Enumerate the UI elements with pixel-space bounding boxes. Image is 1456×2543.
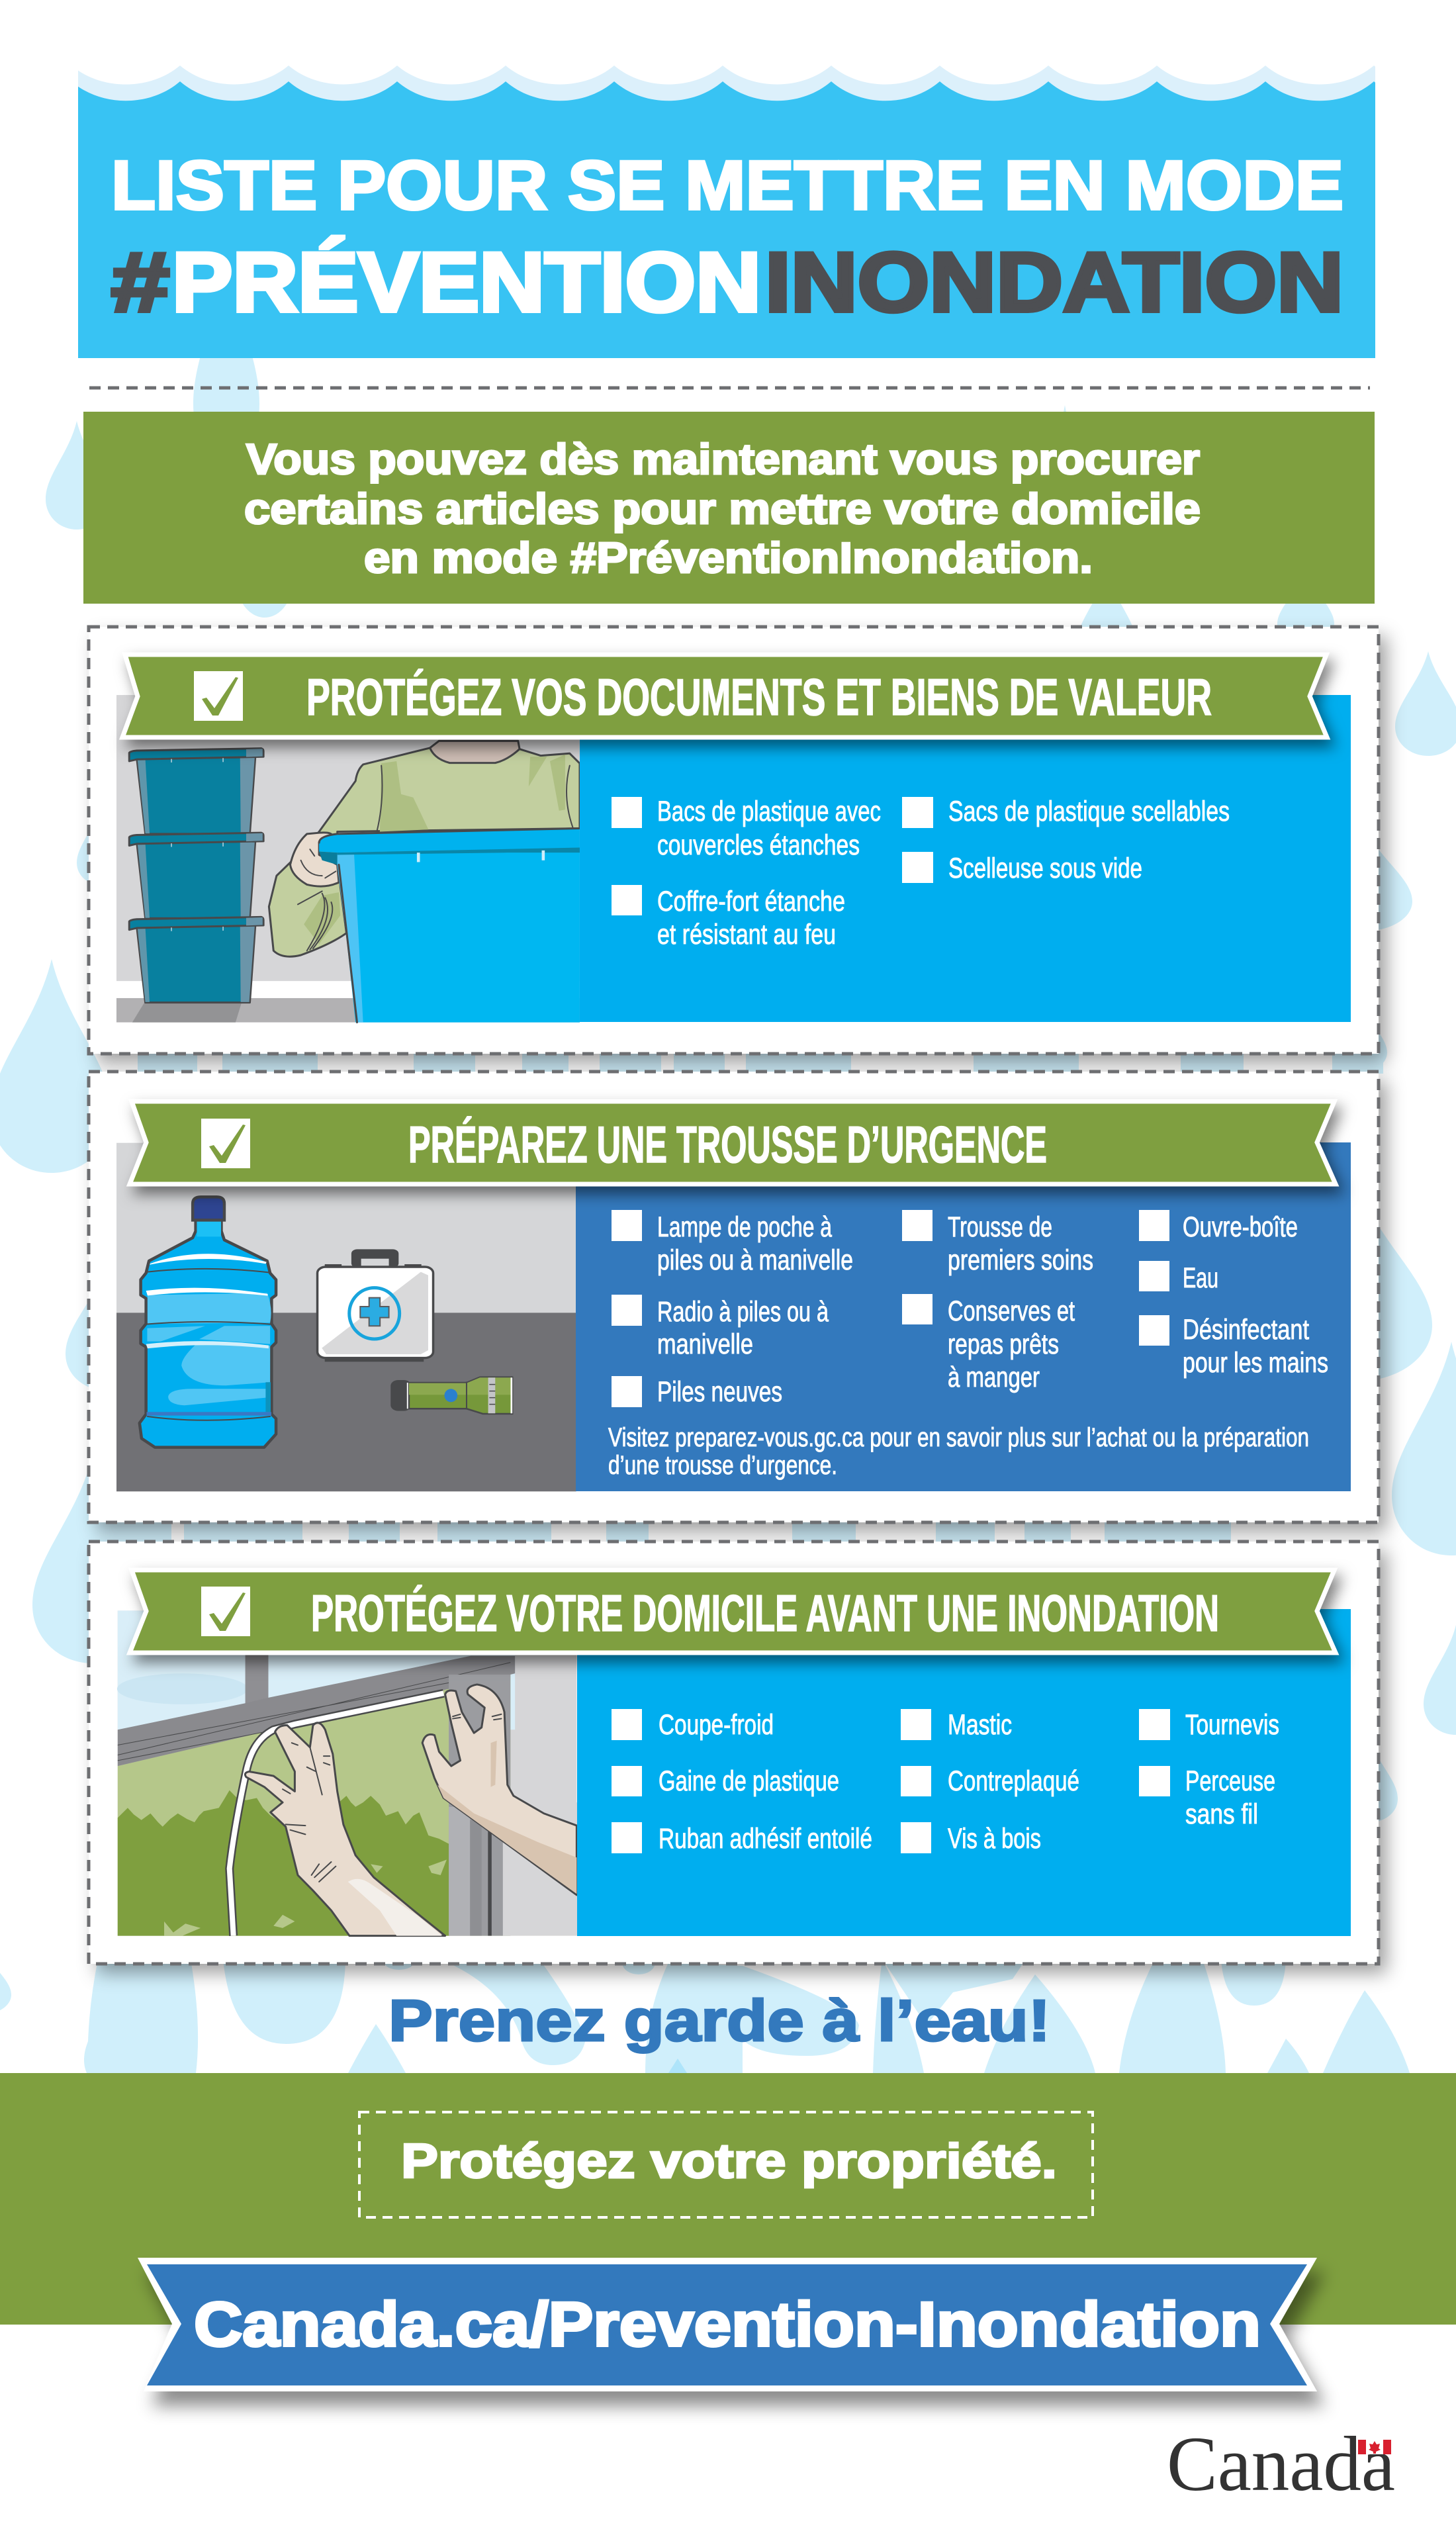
item: cordless drill: sans fil [1185,1798,1258,1830]
heading ribbon [122,655,1327,737]
item: flashlight [612,1210,853,1276]
item: first aid kit [902,1210,1093,1276]
item: hand sanitizer: pour les mains [1183,1347,1328,1379]
item: batteries [612,1376,782,1408]
item: plywood [901,1765,1079,1797]
water wave edge [78,62,1375,101]
item: water [1139,1261,1218,1294]
right hand [422,1685,576,1895]
item: duct tape: Ruban adhésif entoilé [659,1823,872,1855]
item: canned food: à manger [948,1362,1040,1393]
item: first aid kit: premiers soins [948,1244,1093,1276]
title line 2 [111,235,1343,329]
panel: protect your home [89,1542,1379,1964]
list background [580,695,1351,1022]
Canada wordmark: Canada [1167,2421,1395,2507]
dashed callout [359,2112,1093,2217]
flashlight [390,1377,512,1414]
item: screwdriver [1139,1709,1279,1741]
illustration: water jug, first aid kit, flashlight [116,1143,576,1491]
item: radio [612,1295,829,1360]
item: canned food: Conserves et [948,1295,1075,1327]
first aid kit [318,1249,433,1362]
item: radio: manivelle [657,1328,753,1360]
heading ribbon [130,1101,1336,1184]
item: caulking: Mastic [948,1709,1012,1741]
item: wood screws: Vis à bois [948,1823,1041,1855]
illustration: person carrying plastic bins [116,695,580,1023]
item: plastic bins: Bacs de plastique avec [657,796,881,827]
note: preparedness website: d’une trousse d’urgence. [608,1451,837,1480]
item: first aid kit: Trousse de [948,1211,1052,1243]
heading ribbon: PRÉPAREZ UNE TROUSSE D’URGENCE [408,1115,1047,1174]
item: plastic sheeting [612,1765,839,1797]
item: sealable bags [902,796,1230,828]
title line 2: PRÉVENTION [172,235,761,329]
item: screwdriver: Tournevis [1185,1709,1279,1741]
icon: Canadian flag [1358,2440,1391,2454]
heading ribbon [130,1570,1336,1653]
item: cordless drill [1139,1765,1275,1830]
title line 2: INONDATION [765,235,1343,329]
left hand [245,1723,445,1936]
title line 2: # [111,235,169,329]
item: canned food: repas prêts [948,1328,1059,1360]
item: weatherstripping: Coupe-froid [659,1709,774,1741]
item: sealable bags: Sacs de plastique scellables [948,796,1230,827]
item: safe: Coffre-fort étanche [657,886,845,917]
list background [577,1609,1351,1936]
intro panel: Vous pouvez dès maintenant vous procurer [246,435,1200,483]
intro panel: en mode #PréventionInondation. [364,533,1093,582]
list background [576,1142,1351,1491]
dashed callout: Protégez votre propriété. [401,2135,1057,2188]
illustration: hands applying weatherstripping to window [117,1610,577,1936]
panel: protect documents and valuables [89,627,1379,1054]
item: hand sanitizer [1139,1314,1328,1379]
item: weatherstripping [612,1709,774,1741]
item: flashlight: Lampe de poche à [657,1211,832,1243]
item: can opener [1139,1210,1298,1243]
item: water: Eau [1183,1262,1218,1294]
intro panel [83,412,1375,604]
item: safe: et résistant au feu [657,919,836,950]
background: water drops [0,252,1456,2092]
item: safe [612,885,845,950]
note: preparedness website [608,1423,1309,1480]
panel: emergency kit [89,1072,1379,1522]
item: vacuum sealer [902,852,1142,884]
slogan: water warning: Prenez garde à l’eau! [388,1988,1050,2053]
item: cordless drill: Perceuse [1185,1765,1275,1797]
item: batteries: Piles neuves [657,1376,782,1408]
green footer band [0,2073,1456,2325]
web address ribbon [138,2258,1317,2391]
item: plywood: Contreplaqué [948,1765,1079,1797]
item: plastic bins: couvercles étanches [657,829,860,861]
item: duct tape [612,1822,872,1855]
item: caulking [901,1709,1012,1741]
item: hand sanitizer: Désinfectant [1183,1314,1309,1346]
item: canned food [902,1294,1075,1393]
title line 1: LISTE POUR SE METTRE EN MODE [111,147,1343,224]
water jug [140,1197,276,1448]
item: radio: Radio à piles ou à [657,1296,829,1328]
item: flashlight: piles ou à manivelle [657,1244,853,1276]
item: plastic sheeting: Gaine de plastique [659,1765,839,1797]
item: vacuum sealer: Scelleuse sous vide [948,853,1142,884]
item: plastic bins [612,796,881,861]
item: wood screws [901,1822,1041,1855]
intro panel: certains articles pour mettre votre domicile [244,485,1201,533]
header banner [78,66,1375,358]
web address ribbon: Canada.ca/Prevention-Inondation [194,2289,1261,2360]
item: can opener: Ouvre-boîte [1183,1211,1298,1243]
